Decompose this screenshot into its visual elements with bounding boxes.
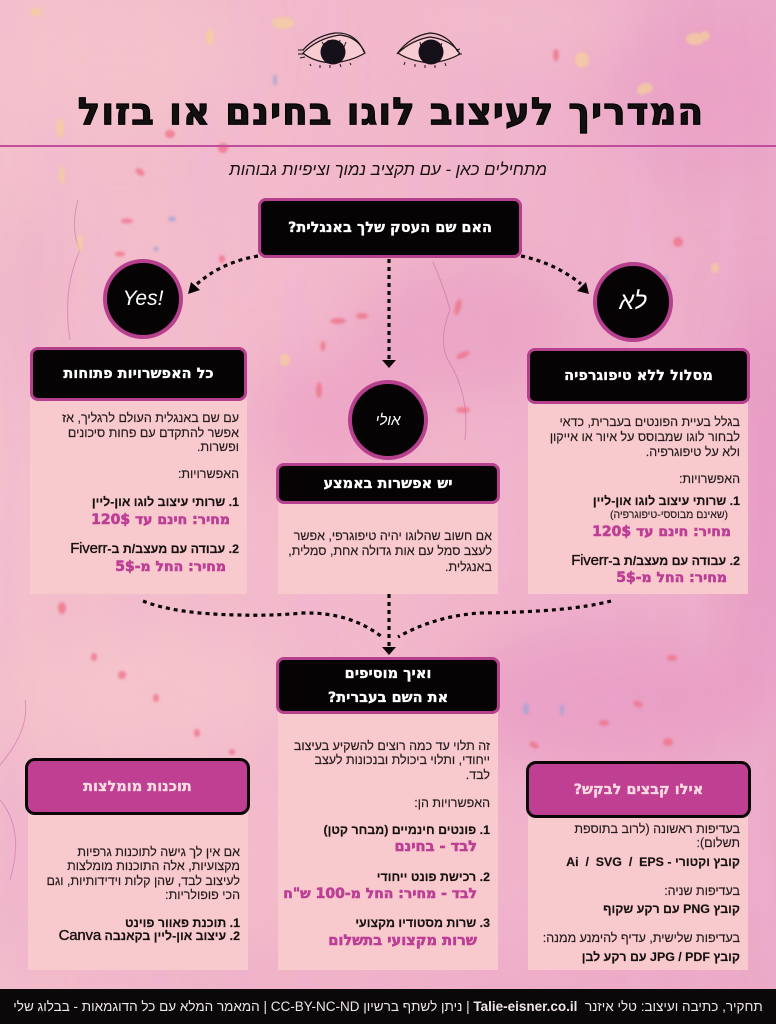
option 1 note: (שאינם מבוססי-טיפוגרפיה) bbox=[610, 509, 728, 521]
price 2: מחיר: החל מ-5$ bbox=[616, 570, 727, 586]
panel: how to add the Hebrew name: האפשרויות הן: bbox=[414, 796, 490, 810]
third preference: בעדיפות שלישית, עדיף להימנע ממנה: bbox=[543, 931, 740, 945]
price 1: מחיר: חינם עד 120$ bbox=[592, 524, 731, 540]
panel: which files to ask for: קובץ JPG / PDF עם רקע לבן bbox=[582, 950, 740, 964]
panel: no typography path bbox=[527, 348, 750, 594]
panel heading: כל האפשרויות פתוחות bbox=[63, 366, 214, 382]
panel heading bbox=[25, 758, 250, 815]
title: המדריך לעיצוב לוגו בחינם או בזול bbox=[78, 90, 704, 133]
title divider line bbox=[0, 145, 776, 147]
panel: how to add the Hebrew name bbox=[276, 657, 500, 970]
price 3: שרות מקצועי בתשלום bbox=[328, 932, 477, 949]
footer credits bar bbox=[0, 989, 776, 1024]
intro text: זה תלוי עד כמה רוצים להשקיע בעיצוב bbox=[294, 739, 490, 753]
panel: which files to ask for: תשלום): bbox=[696, 836, 740, 850]
panel: middle path (maybe): באנגלית. bbox=[445, 560, 492, 574]
panel: all options open (English name) bbox=[30, 347, 247, 594]
circle: no bbox=[593, 262, 673, 342]
panel: recommended software bbox=[25, 758, 250, 970]
second preference: בעדיפות שניה: bbox=[664, 884, 740, 898]
panel: which files to ask for bbox=[526, 761, 751, 970]
intro text: בגלל בעיית הפונטים בעברית, כדאי bbox=[559, 415, 740, 429]
option 1: 1. פונטים חינמיים (מבחר קטן) bbox=[324, 823, 490, 837]
option 1: 1. שרותי עיצוב לוגו און-ליין bbox=[92, 495, 239, 509]
panel: all options open (English name): האפשרויות: bbox=[178, 467, 239, 481]
price 2: לבד - מחיר: החל מ-100 ש"ח bbox=[283, 886, 477, 902]
panel heading bbox=[527, 348, 750, 404]
panel: recommended software: מקצועיות, אלה התוכנות מומלצות bbox=[67, 859, 240, 873]
panel: middle path (maybe): לעצב סמל עם אות גדולה אחת, סמלית, bbox=[288, 544, 492, 558]
panel heading bbox=[276, 657, 500, 714]
panel heading: ואיך מוסיפים bbox=[345, 666, 431, 682]
option 2: 2. עבודה עם מעצב/ת ב-Fiverr bbox=[70, 540, 239, 557]
question box: is the business name in English bbox=[258, 198, 522, 258]
question box: is the business name in English: האם שם העסק שלך באנגלית? bbox=[288, 220, 492, 236]
panel heading: את השם בעברית? bbox=[328, 690, 448, 706]
option 1: 1. שרותי עיצוב לוגו און-ליין bbox=[593, 494, 740, 508]
first preference: בעדיפות ראשונה (לרוב בתוספת bbox=[574, 822, 740, 836]
panel: how to add the Hebrew name: לבד. bbox=[466, 768, 490, 782]
circle: maybe bbox=[348, 380, 428, 460]
panel: no typography path: ולא על טיפוגרפיה. bbox=[646, 445, 740, 459]
icon: pair of eyes bbox=[298, 32, 462, 68]
panel: which files to ask for: קובץ PNG עם רקע שקוף bbox=[603, 902, 740, 916]
circle: maybe: אולי bbox=[375, 412, 401, 428]
panel: recommended software: 2. עיצוב און-ליין בקאנבה Canva bbox=[59, 927, 240, 944]
circle: no: לא bbox=[619, 288, 647, 315]
circle: Yes: Yes! bbox=[123, 287, 163, 310]
panel: middle path (maybe) bbox=[276, 463, 500, 594]
intro text: עם שם באנגלית העולם לרגליך, אז bbox=[62, 411, 239, 425]
panel: no typography path: האפשרויות: bbox=[679, 472, 740, 486]
intro text: אם אין לך גישה לתוכנות גרפיות bbox=[77, 845, 240, 859]
price 1: מחיר: חינם עד 120$ bbox=[91, 512, 230, 528]
panel: which files to ask for: קובץ וקטורי - Ai / SVG / EPS bbox=[566, 855, 740, 869]
panel: recommended software: לעיצוב לבד, שהן קלות וידידותיות, וגם bbox=[47, 874, 240, 888]
panel: recommended software: הכי פופולריות: bbox=[165, 888, 240, 902]
panel: how to add the Hebrew name: ייחודי, ותלוי ביכולת ובנכונות לעצב bbox=[314, 753, 490, 767]
option 2: 2. עבודה עם מעצב/ת ב-Fiverr bbox=[571, 552, 740, 569]
price 1: לבד - בחינם bbox=[394, 838, 477, 855]
panel heading: תוכנות מומלצות bbox=[83, 778, 192, 794]
panel heading bbox=[30, 347, 247, 401]
option 2: 2. רכישת פונט ייחודי bbox=[377, 870, 490, 884]
option 3: 3. שרות מסטודיו מקצועי bbox=[355, 916, 490, 930]
subtitle: מתחילים כאן - עם תקציב נמוך וציפיות גבוהות bbox=[229, 160, 547, 179]
panel heading: יש אפשרות באמצע bbox=[323, 476, 453, 492]
panel heading bbox=[276, 463, 500, 504]
panel: no typography path: לבחור לוגו שמבוסס על איור או אייקון bbox=[550, 430, 740, 444]
body text: אם חשוב שהלוגו יהיה טיפוגרפי, אפשר bbox=[294, 529, 492, 543]
panel: all options open (English name): אפשר להתקדם עם פחות סיכונים bbox=[68, 426, 239, 440]
circle: Yes bbox=[103, 259, 183, 339]
software list: 1. תוכנת פאוור פוינט bbox=[125, 916, 240, 930]
panel heading bbox=[526, 761, 751, 818]
panel: all options open (English name): ופשרות. bbox=[197, 440, 239, 454]
panel heading: מסלול ללא טיפוגרפיה bbox=[564, 368, 713, 384]
panel heading: אילו קבצים לבקש? bbox=[574, 782, 703, 798]
price 2: מחיר: החל מ-5$ bbox=[115, 559, 226, 575]
footer credits bar: תחקיר, כתיבה ועיצוב: טלי איזנר Talie-eisner.co.il | ניתן לשתף ברשיון CC-BY-NC-ND | המאמר המלא עם כל הדוגמאות - בבלוג שלי bbox=[13, 999, 763, 1014]
